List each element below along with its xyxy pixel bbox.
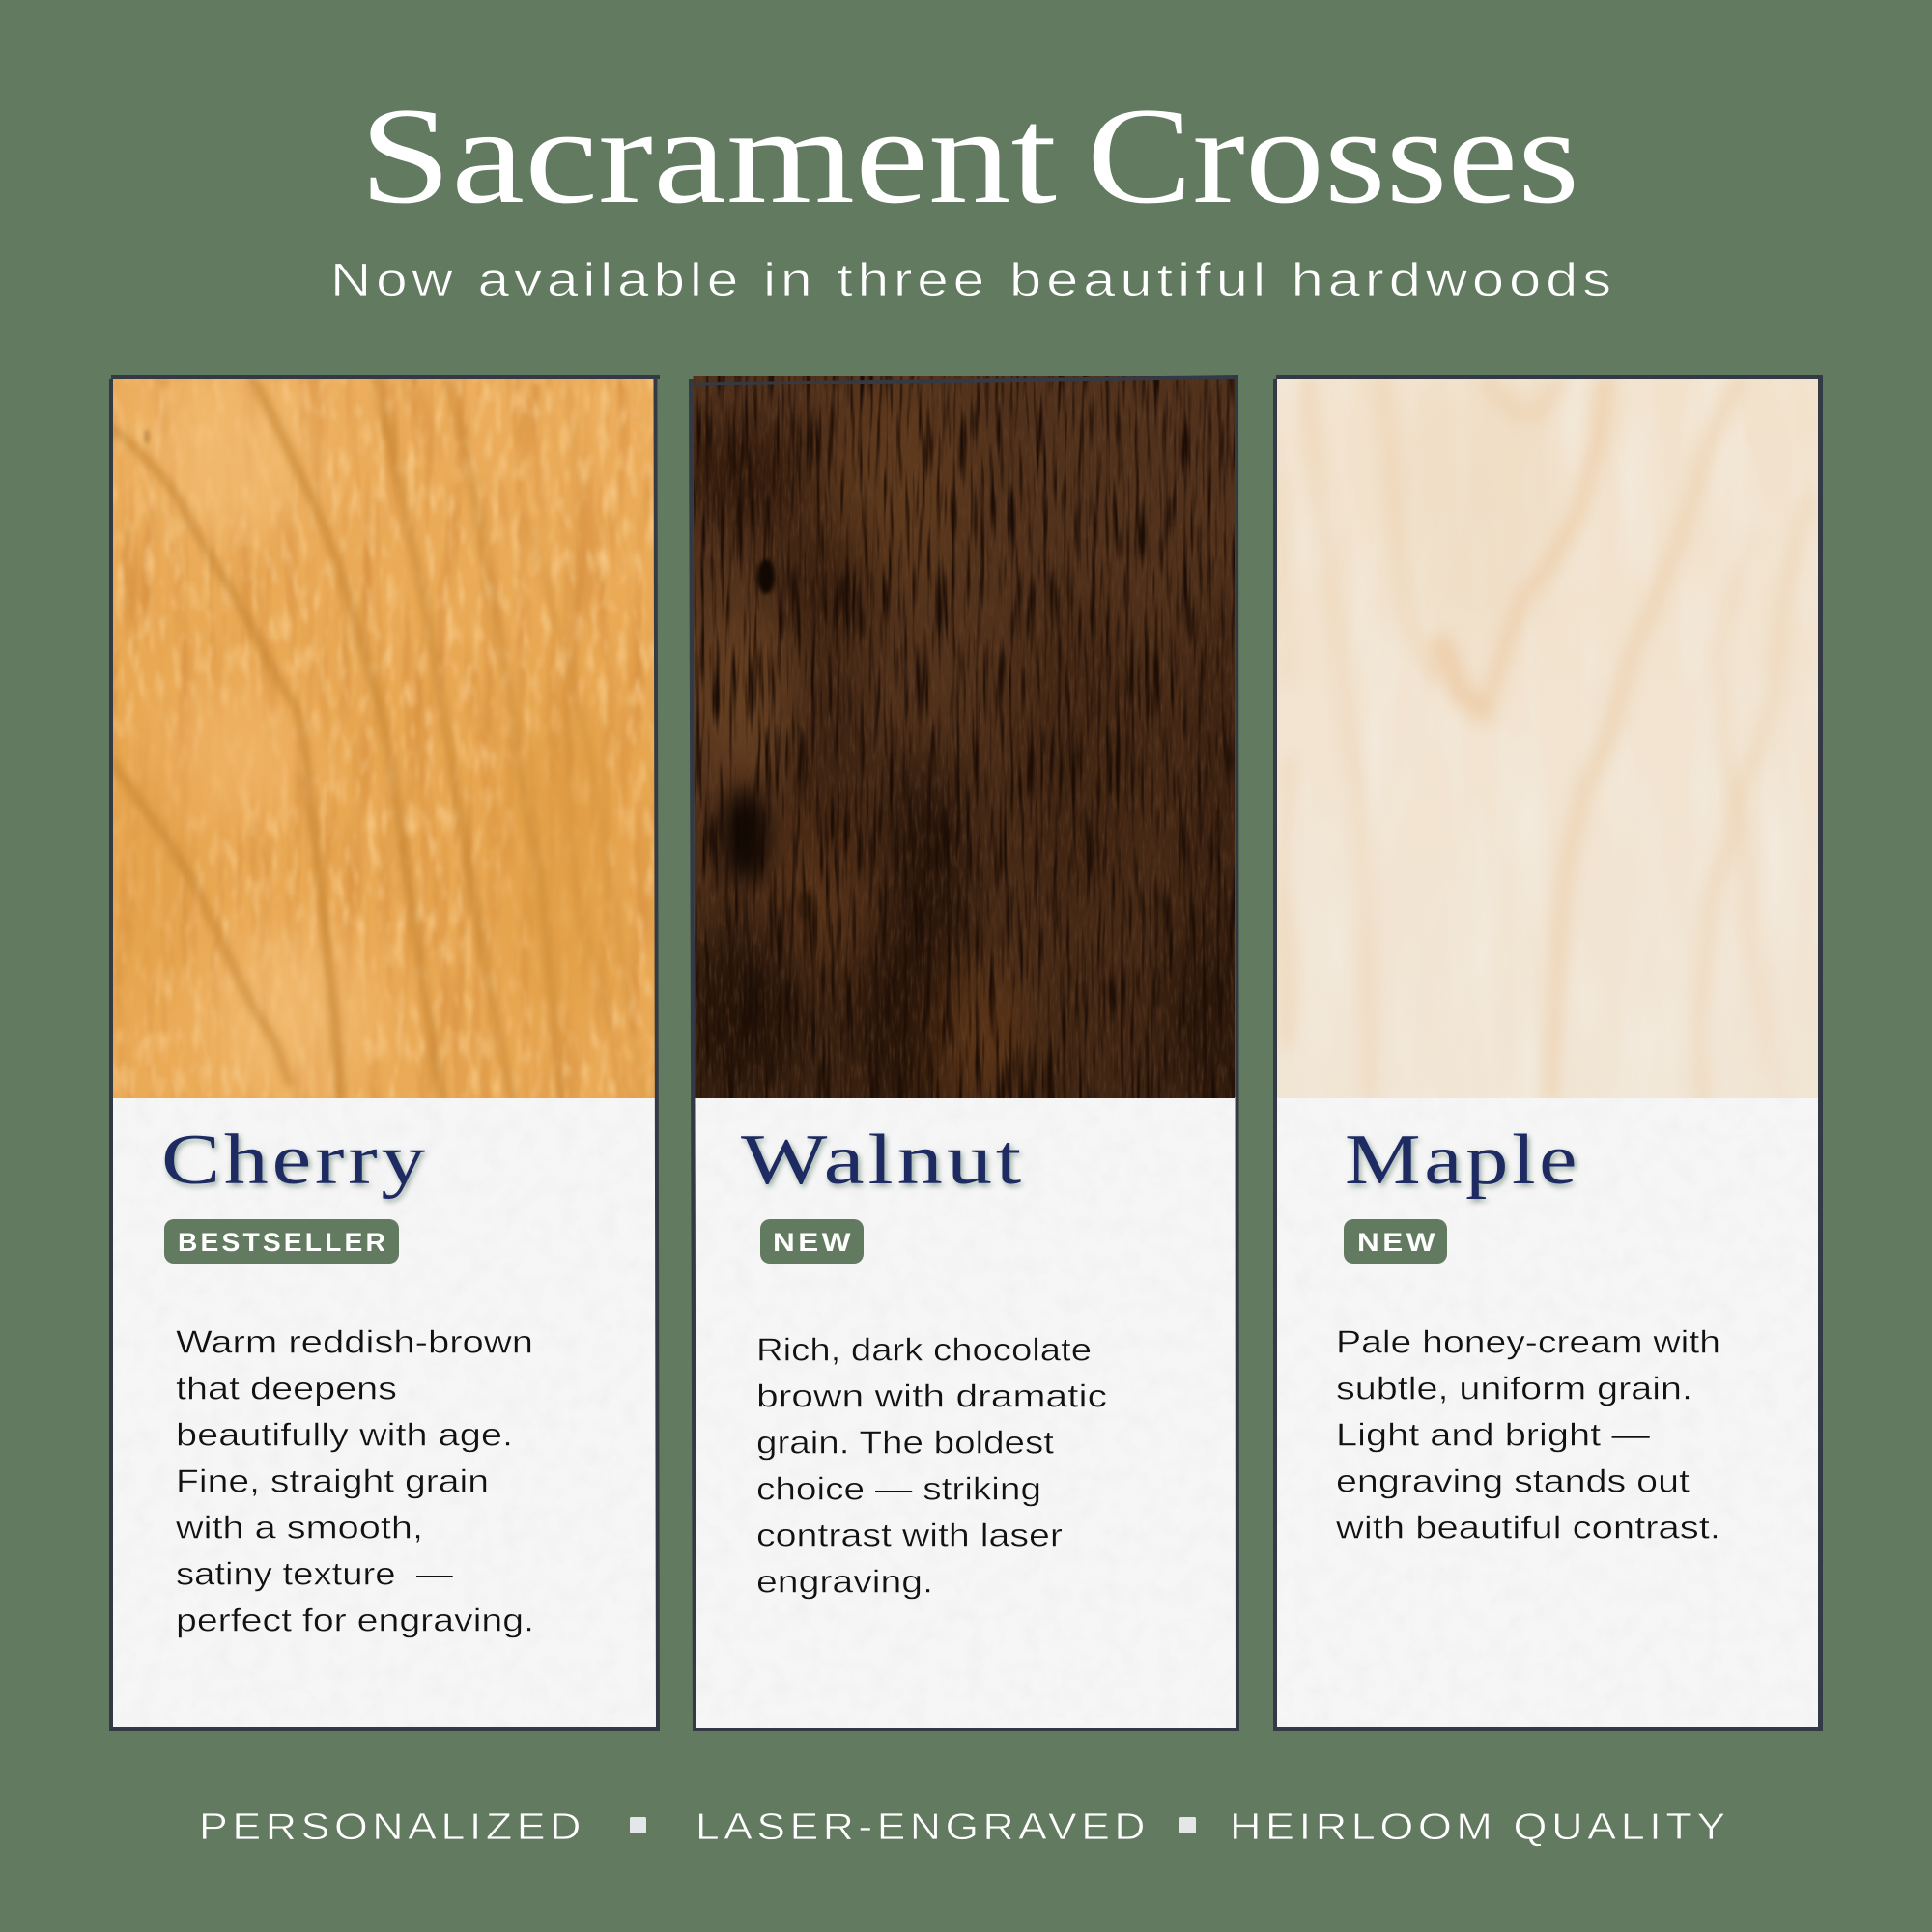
maple description: subtle, uniform grain.	[1336, 1372, 1692, 1406]
walnut description	[756, 1333, 1107, 1600]
wood texture: cherry	[106, 367, 655, 1101]
badge: bestseller	[164, 1219, 399, 1264]
footer: laser-engraved: LASER-ENGRAVED	[696, 1806, 1150, 1848]
title: Crosses	[1087, 79, 1579, 232]
maple description: engraving stands out	[1336, 1464, 1690, 1499]
badge: new: NEW	[773, 1228, 854, 1257]
walnut frame	[689, 375, 1239, 1731]
walnut description: contrast with laser	[756, 1519, 1063, 1553]
walnut description: grain. The boldest	[756, 1426, 1055, 1461]
cherry name: Cherry	[161, 1121, 429, 1200]
walnut description: brown with dramatic	[756, 1379, 1107, 1414]
walnut description: choice — striking	[756, 1472, 1041, 1507]
wood texture: maple	[1276, 377, 1818, 1098]
bullet	[630, 1817, 646, 1833]
title: Sacrament	[359, 79, 1057, 232]
walnut description: Rich, dark chocolate	[756, 1333, 1092, 1368]
footer tagline	[199, 1806, 1730, 1848]
cherry description: that deepens	[176, 1372, 397, 1406]
maple paper background	[1276, 1097, 1818, 1728]
badge: new: NEW	[1357, 1228, 1438, 1257]
maple description	[1335, 1325, 1720, 1546]
title	[359, 79, 1579, 232]
cherry paper texture	[113, 1098, 656, 1728]
maple description: Light and bright —	[1336, 1418, 1651, 1453]
maple tone patch	[1408, 399, 1543, 600]
maple frame	[1273, 375, 1823, 1731]
panel: cherry	[106, 367, 660, 1731]
cherry description: beautifully with age.	[176, 1418, 513, 1453]
cherry description	[175, 1325, 534, 1638]
cherry description: Warm reddish-brown	[176, 1325, 533, 1360]
cherry description: perfect for engraving.	[176, 1604, 534, 1638]
badge: new	[1344, 1219, 1447, 1264]
walnut paper background	[696, 1097, 1236, 1728]
footer: personalized: PERSONALIZED	[199, 1806, 585, 1848]
panel: maple	[1273, 375, 1823, 1731]
wood texture: walnut	[681, 376, 1261, 1111]
badge: bestseller: BESTSELLER	[178, 1228, 388, 1257]
cherry description: with a smooth,	[175, 1511, 423, 1546]
badge: new	[760, 1219, 864, 1264]
cherry description: Fine, straight grain	[176, 1464, 489, 1499]
cherry paper background	[113, 1097, 656, 1728]
footer: heirloom quality: HEIRLOOM QUALITY	[1230, 1806, 1730, 1848]
walnut paper texture	[696, 1098, 1236, 1728]
cherry description: satiny texture —	[176, 1557, 454, 1592]
panel: walnut	[681, 375, 1261, 1731]
walnut name: Walnut	[741, 1121, 1025, 1200]
maple name: Maple	[1345, 1121, 1580, 1200]
subtitle: beautiful hardwoods	[1009, 255, 1616, 306]
walnut knots	[723, 559, 811, 922]
walnut description: engraving.	[756, 1565, 933, 1600]
cherry frame	[109, 375, 660, 1731]
maple paper texture	[1276, 1098, 1818, 1728]
maple description: Pale honey-cream with	[1336, 1325, 1720, 1360]
maple description: with beautiful contrast.	[1335, 1511, 1720, 1546]
subtitle	[330, 255, 1616, 306]
bullet	[1179, 1817, 1196, 1833]
subtitle: Now available in three	[330, 255, 989, 306]
